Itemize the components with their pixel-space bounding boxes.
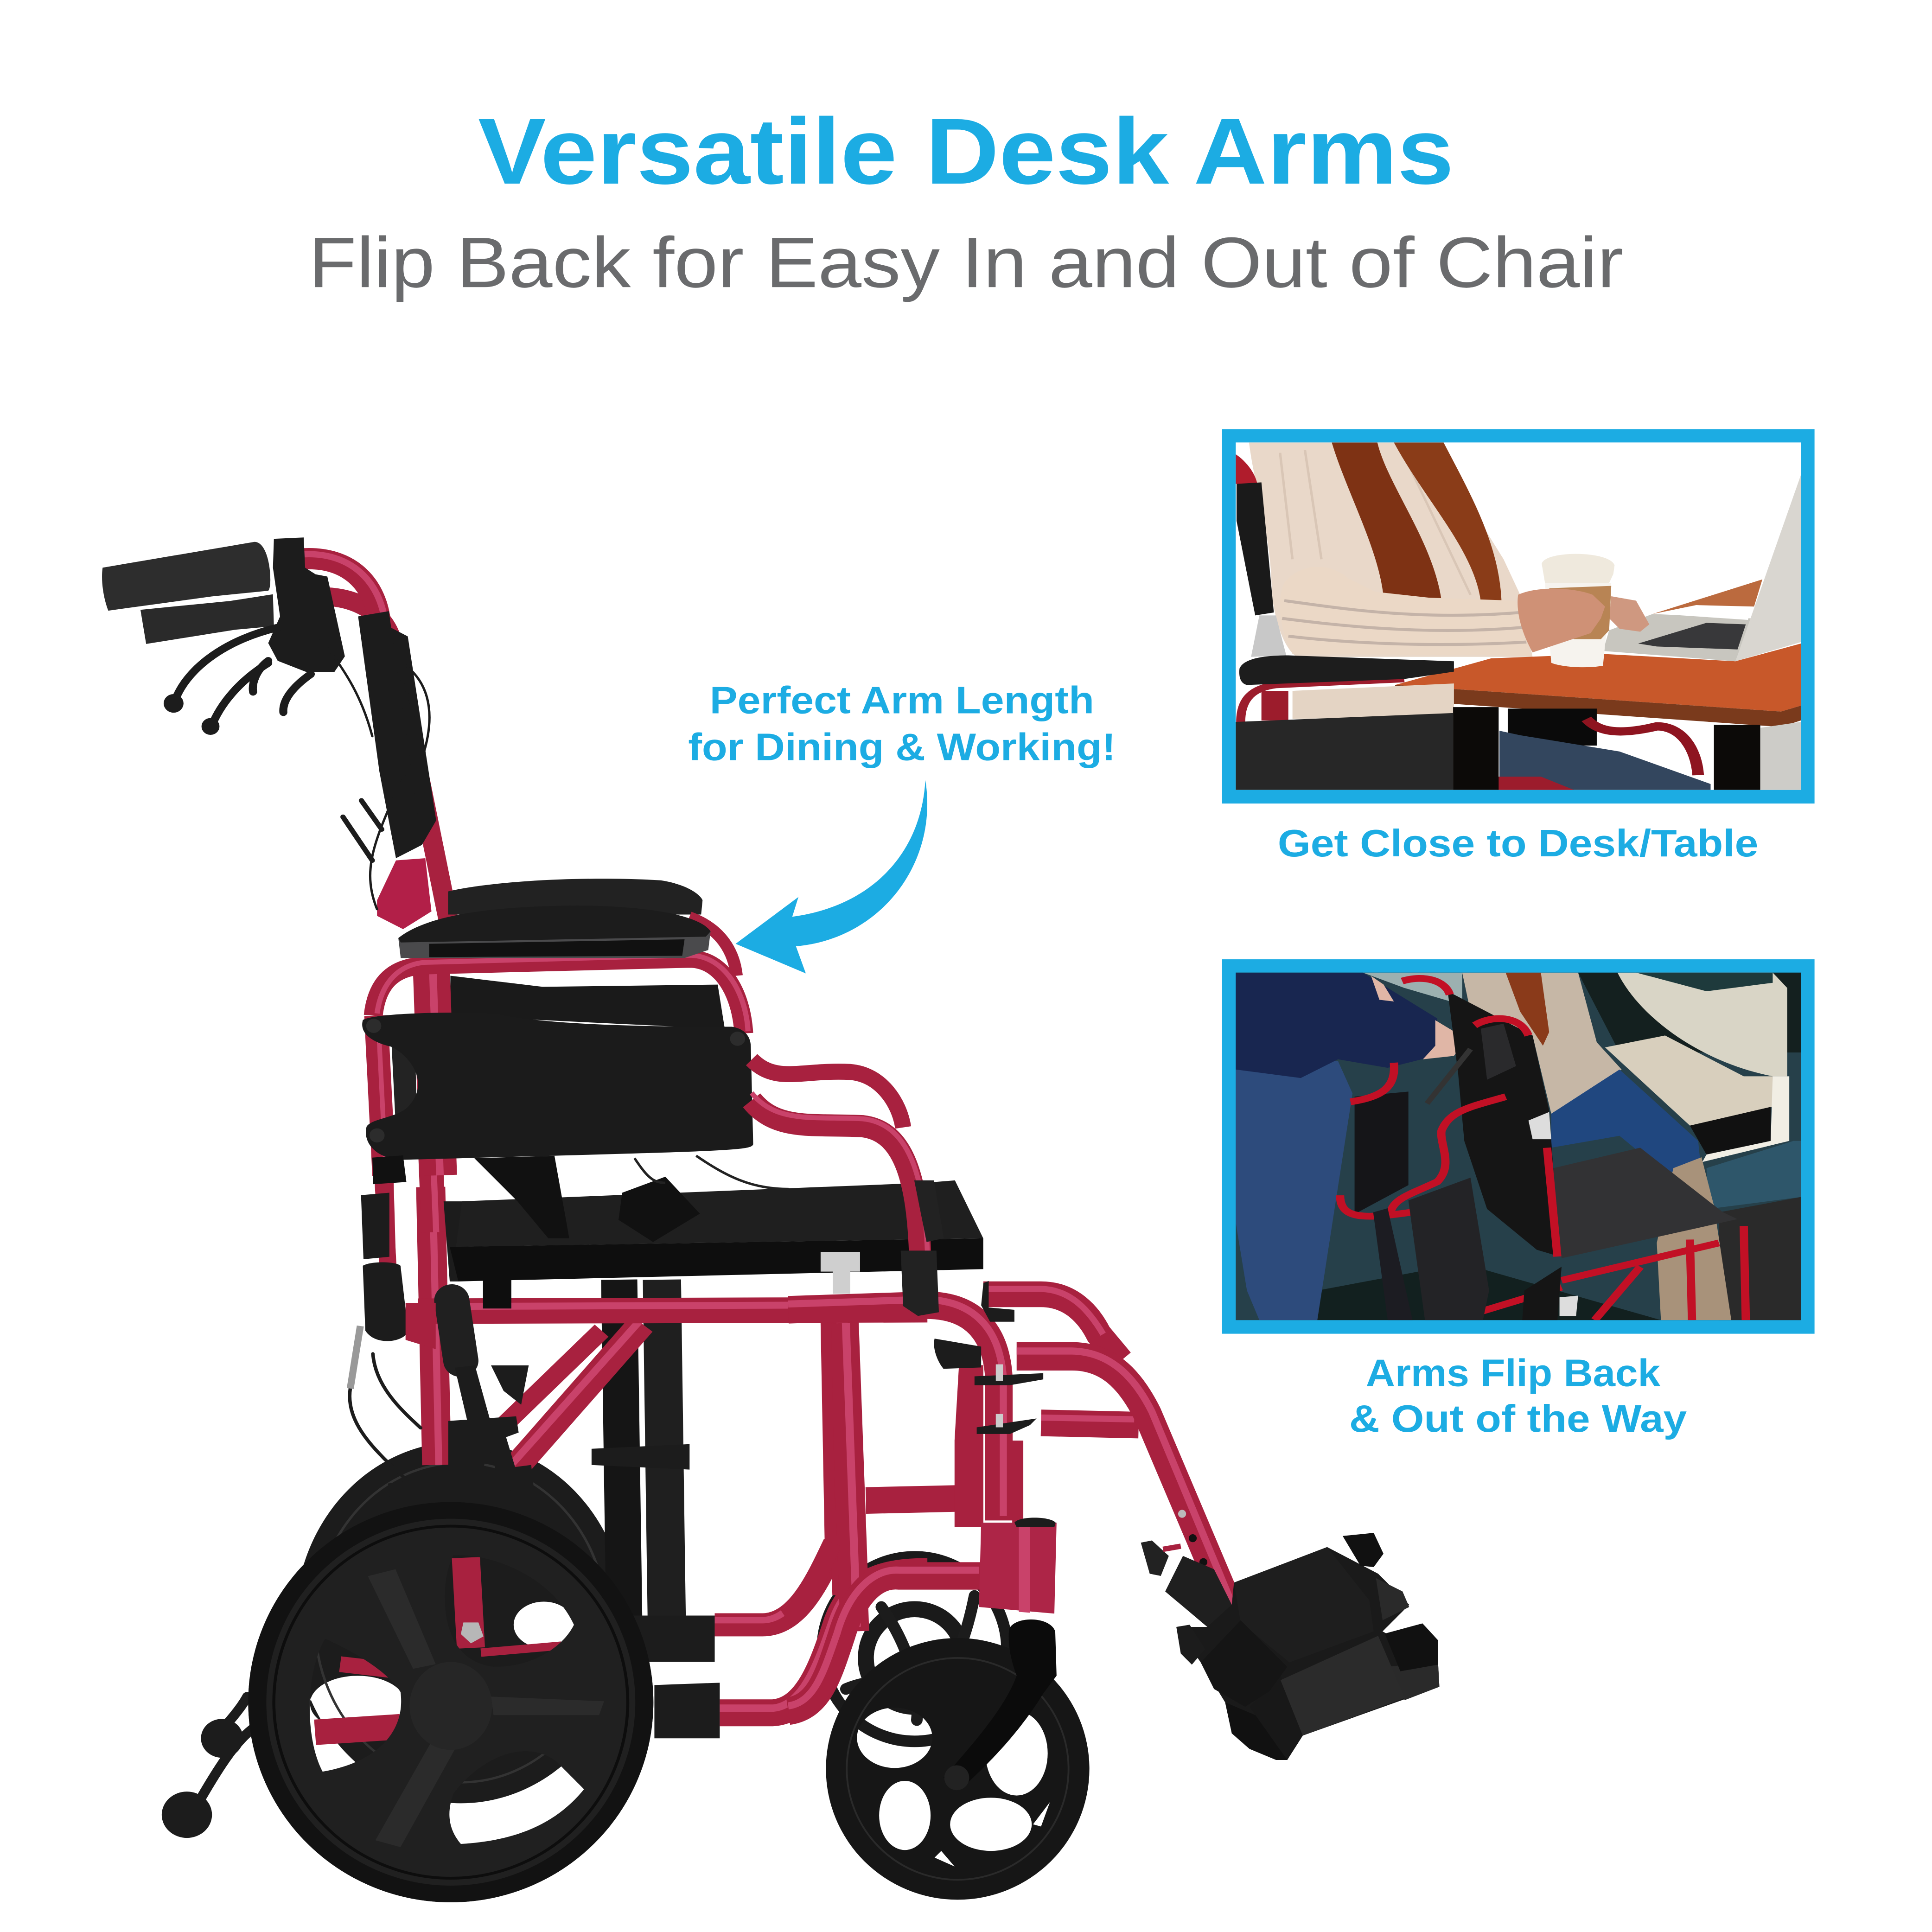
rear wheel far side [295,1442,627,1803]
left brake assembly, cables, anti-tippers [162,1262,534,1838]
callout: perfect arm length: Perfect Arm Length [710,679,1094,722]
panel: desk photo [1222,429,1815,803]
panel: car transfer photo [1222,959,1815,1334]
seat [450,1156,983,1308]
footrest [1141,1533,1439,1760]
subtitle: Flip Back for Easy In and Out of Chair [309,222,1623,302]
title: Versatile Desk Arms [478,99,1454,204]
caption: car transfer photo [1349,1352,1687,1440]
caption: car transfer photo: & Out of the Way [1349,1397,1687,1440]
rear wheel near side [248,1502,653,1902]
lower frame and folding brace [383,1178,927,1738]
caption: car transfer photo: Arms Flip Back [1366,1352,1660,1395]
callout: perfect arm length [688,679,1116,769]
back frame posts between arm panel and main tube [361,1140,466,1282]
arrow: pointing to arm rest [736,780,927,973]
rear caster wheel [823,1557,1007,1741]
callout: perfect arm length: for Dining & Working! [688,726,1116,769]
upper chair: back post, push handles and brakes [102,537,753,1184]
front frame, footrest hanger and seat clamp [786,1281,1237,1711]
wheelchair product image [102,537,1439,1902]
front caster wheel and fork [826,1620,1090,1900]
caption: desk photo: Get Close to Desk/Table [1278,822,1758,865]
seat hinge [821,1252,860,1294]
front side hanger tubes [752,1059,944,1316]
